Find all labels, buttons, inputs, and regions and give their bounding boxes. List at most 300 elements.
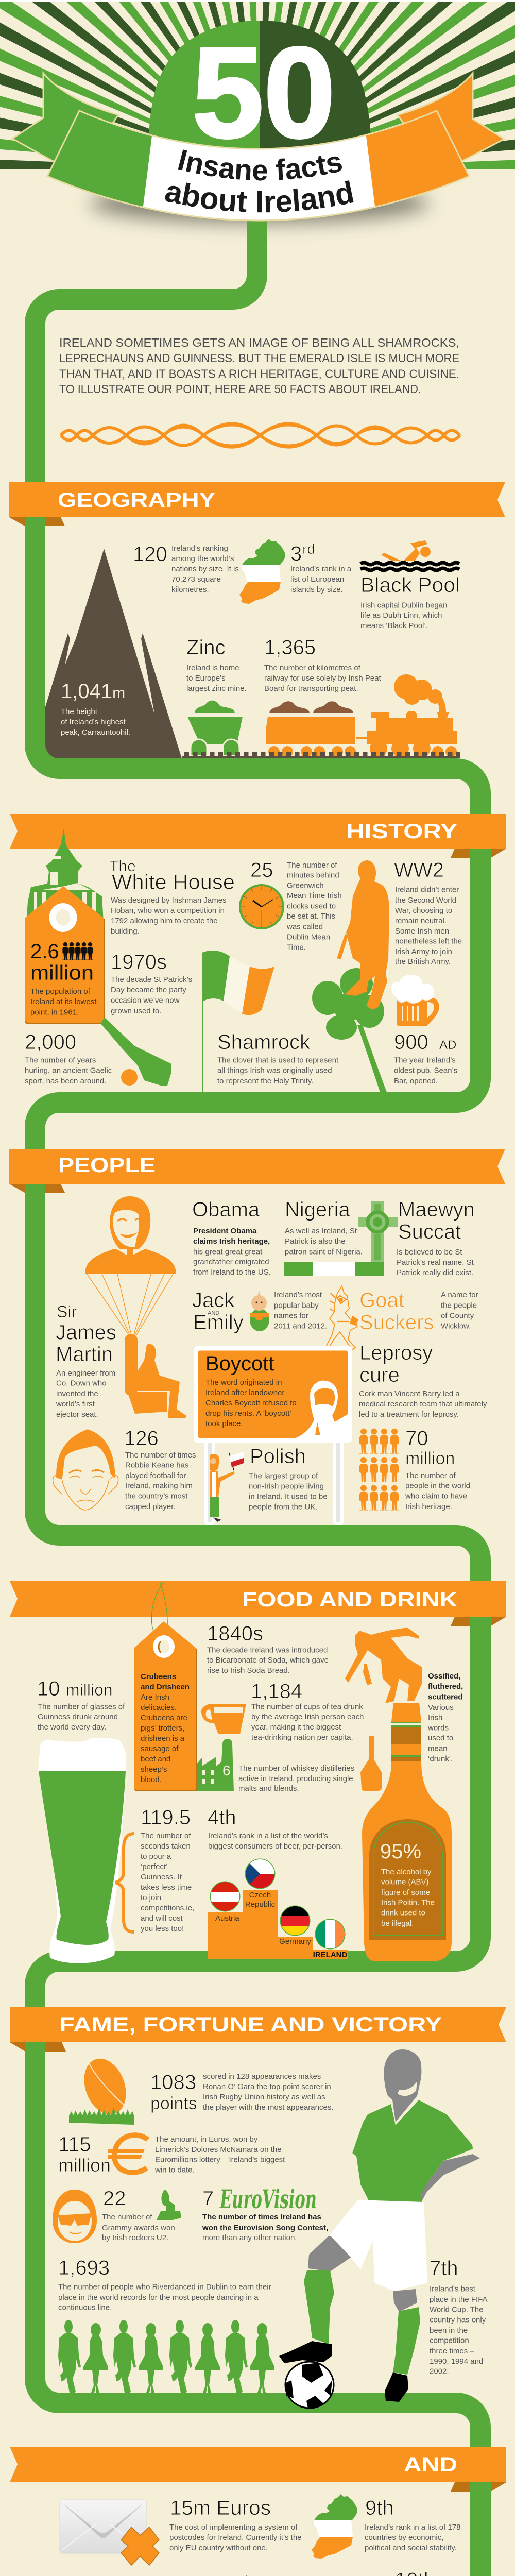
fact: 126: the country’s most (125, 1492, 188, 1501)
section: food and drink (37, 1582, 463, 1963)
fact: 1083 points with rugby ball (69, 2053, 333, 2125)
fact: 2,000 (25, 1031, 112, 1086)
fact: 7th world cup: World Cup. The (430, 2305, 483, 2314)
fact: 126: capped player. (125, 1502, 176, 1511)
icon: large poitin bottle: figure of some (381, 1888, 430, 1897)
fact: Ossified (427, 1672, 463, 1764)
fact: 25 minutes with clock: Mean Time Irish (287, 891, 342, 900)
fact: 25 minutes with clock (240, 859, 342, 952)
fact: Black Pool with swimmer (360, 540, 460, 630)
icon: Polish man with flag (210, 1452, 244, 1522)
icon: large poitin bottle: be illegal. (381, 1919, 414, 1928)
icon: large poitin bottle (362, 1703, 452, 1961)
intro text: THAN THAT, AND IT BOASTS A RICH HERITAGE, CULTURE AND CUISINE. (59, 367, 459, 380)
portrait: Bono (53, 2190, 97, 2243)
banner: PEOPLE: PEOPLE (58, 1154, 156, 1177)
icon: distillery factory (196, 1739, 234, 1791)
tag: 2.6 million population: 2.6 (30, 940, 59, 963)
fact: Goat Suckers: Wicklow. (441, 1322, 471, 1330)
fact: 70 million: people in the world (405, 1482, 470, 1490)
fact: 2,000: sport, has been around. (25, 1077, 106, 1086)
fact: Obama: claims Irish heritage, (193, 1237, 270, 1246)
fact: WW2: the British Army. (395, 957, 451, 966)
fact: Maewyn Succat: Is believed to be St (397, 1248, 462, 1257)
fact: Nigeria: Patrick is also the (285, 1237, 346, 1246)
fact: 1,041m mountain text: 1,041m (61, 680, 125, 703)
fact: 9th: 9th (365, 2497, 394, 2519)
title text: Insane facts about Ireland: Insane facts (178, 149, 342, 181)
fact: 70 million: 70 (405, 1427, 428, 1450)
fact: 126: The number of times (125, 1451, 196, 1460)
sign: Boycott: Boycott (205, 1352, 274, 1375)
fact: Maewyn Succat (397, 1198, 475, 1277)
fact: Black Pool with swimmer: means ‘Black Pool’. (360, 621, 428, 630)
fact: White House: building. (111, 927, 140, 936)
fact: 1,041m mountain text: The height (61, 707, 98, 716)
chart: beer consumption podium: Austria (215, 1914, 239, 1923)
flag: Germany (280, 1905, 310, 1936)
fact: Maewyn Succat: Maewyn (398, 1198, 475, 1221)
sign: Boycott: Charles Boycott refused to (205, 1399, 297, 1408)
fact: 119.5: competitions.ie, (141, 1904, 194, 1912)
flag: Ireland (314, 1919, 347, 1950)
icon: goat sucker creature (327, 1286, 358, 1350)
intro text: TO ILLUSTRATE OUR POINT, HERE ARE 50 FACTS ABOUT IRELAND. (59, 382, 421, 396)
section: fame, fortune and victory (53, 2049, 488, 2409)
icon: White House cupola (26, 828, 104, 922)
fact: 900 AD: oldest pub, Sean’s (394, 1066, 457, 1075)
fact: 119.5 (115, 1806, 194, 1933)
fact: Sir James Martin: ejector seat. (56, 1410, 98, 1419)
fact: 2,000: The number of years (25, 1056, 96, 1064)
fact: 119.5: and will cost (141, 1914, 183, 1923)
fact: 1,693 Riverdance: The number of people who Riverdanced in Dublin to earn their (58, 2283, 271, 2292)
fact: 119.5: to pour a (141, 1852, 171, 1861)
fact: 1,184: The number of cups of tea drunk (251, 1702, 363, 1711)
fact: 6 distilleries: malts and blends. (238, 1784, 299, 1793)
fact: WW2: remain neutral. (395, 917, 447, 925)
fact: 7th world cup: country has only (430, 2316, 486, 2325)
fact: 119.5: seconds taken (141, 1842, 191, 1851)
fact: Maewyn Succat: Patrick’s real name. St (397, 1258, 474, 1267)
fact: 1840s: to Bicarbonate of Soda, which gave (207, 1656, 329, 1665)
fact: 120: Ireland’s ranking (171, 544, 228, 553)
fact: 7th world cup: 2002. (430, 2367, 449, 2376)
flag: Czech Republic (245, 1859, 275, 1889)
fact: 10 million: 10 (37, 1677, 60, 1700)
fact: Sir James Martin: Co. Down who (56, 1379, 107, 1388)
fact: 25 minutes with clock: Greenwich (287, 882, 324, 890)
orange knot ornament (61, 423, 460, 447)
chart: beer consumption podium: Germany (279, 1937, 311, 1946)
banner: FOOD AND DRINK (10, 1581, 506, 1617)
fact: Polish: Polish (250, 1445, 306, 1468)
fact: Ossified: fluthered, (428, 1682, 463, 1691)
fact: 22 Grammys (102, 2188, 181, 2242)
fact: 7 Eurovision (202, 2184, 328, 2242)
fact: 115 million with euro sign (58, 2133, 285, 2176)
fact: WW2: Ireland didn’t enter (395, 885, 459, 894)
fact: 900 AD: The year Ireland’s (394, 1056, 456, 1064)
fact: 70 million: million (405, 1449, 455, 1468)
fact: Leprosy cure: Cork man Vincent Barry led a (359, 1389, 460, 1398)
fact: Goat Suckers: of County (441, 1312, 474, 1320)
fact: 1,365: The number of kilometres of (264, 664, 361, 672)
fact: 126: played football for (125, 1471, 186, 1480)
fact: 22 Grammys: by Irish rockers U2. (102, 2233, 168, 2242)
fact: Zinc (186, 636, 247, 693)
fact: 1970s: Day became the party (111, 986, 186, 994)
sign: Boycott: Ireland after landowner (205, 1388, 284, 1397)
fact: 15m Euros: postcodes for Ireland. Currently it’s the (169, 2533, 302, 2542)
fact: 70 million: The number of (405, 1471, 456, 1480)
tag: Crubeens and Drisheen: Crubeens (141, 1672, 176, 1681)
fact: 22 Grammys: 22 (103, 2188, 126, 2210)
fact: 1,693 Riverdance: continuous line. (58, 2303, 112, 2312)
fact: 70 million: Irish heritage. (405, 1502, 452, 1511)
fact: 3rd: 3 (290, 543, 302, 565)
fact: WW2: Irish Army to join (395, 947, 452, 956)
fact: 1,693 Riverdance (58, 2257, 271, 2312)
sign: Boycott (194, 1346, 352, 1443)
fact: WW2: Some Irish men (395, 927, 449, 936)
icon: large poitin bottle: drink used to (381, 1909, 425, 1918)
fact: 7th world cup: Ireland’s best (430, 2284, 476, 2294)
fact: 1,184: by the average Irish person each (251, 1713, 364, 1721)
fact: 1,041m mountain text: of Ireland’s highest (61, 718, 126, 726)
banner: GEOGRAPHY: GEOGRAPHY (58, 489, 215, 512)
fact: 7 Eurovision: The number of times Ireland has (202, 2213, 321, 2222)
fact: 1,041m mountain text: peak, Carrauntoohil. (61, 728, 130, 737)
fact: 1083 points with rugby ball: Irish Rugby Union history as well as (203, 2093, 325, 2102)
fact: 7th world cup: 7th (430, 2257, 458, 2280)
fact: 3rd: list of European (290, 575, 344, 584)
fact: 22 Grammys: The number of (102, 2213, 152, 2222)
fact: 7 Eurovision: 7 (202, 2188, 214, 2210)
fact: 119.5: The number of (141, 1832, 191, 1840)
intro text: LEPRECHAUNS AND GUINNESS. BUT THE EMERALD ISLE IS MUCH MORE (59, 351, 459, 365)
icon: Ireland map (239, 538, 287, 605)
fact: 15m Euros: 15m Euros (170, 2497, 271, 2519)
fact: 3rd: islands by size. (290, 585, 343, 594)
fact: 1083 points with rugby ball: Ronan O’ Gara the top point scorer in (203, 2082, 331, 2091)
fact: 7th world cup: competition (430, 2336, 469, 2345)
fact: 115 million with euro sign: 115 (58, 2133, 91, 2156)
tag: 2.6 million population: Ireland at its lowest (30, 997, 97, 1006)
fact: 9th: political and social stability. (365, 2544, 457, 2552)
icon: envelope with X (60, 2500, 159, 2565)
fact: 3rd: Ireland’s rank in a (290, 565, 352, 573)
fact: 1,365: railway for use solely by Irish Peat (264, 674, 382, 683)
fact: 119.5: takes less time (141, 1883, 192, 1892)
fact: 1970s: grown used to. (111, 1007, 161, 1015)
fact: 126: Ireland, making him (125, 1482, 193, 1490)
fact: 1083 points with rugby ball: the player with the most appearances. (203, 2103, 333, 2112)
fact: 7 Eurovision: more than any other nation. (202, 2233, 297, 2242)
fact: 1083 points with rugby ball: scored in 128 appearances makes (203, 2072, 321, 2081)
fact: Jack and Emily with baby: popular baby (274, 1301, 319, 1310)
fact: 15m Euros: only EU country without one. (169, 2544, 268, 2552)
fact: Goat Suckers: Goat (359, 1289, 404, 1312)
title badge: 50: 50 (192, 21, 335, 164)
fact: 115 million with euro sign: Limerick’s Dolores McNamara on the (155, 2145, 282, 2154)
fact: 25 minutes with clock: Dublin Mean (287, 933, 330, 942)
fact: 115 million with euro sign: The amount, in Euros, won by (155, 2135, 258, 2144)
fact: Obama: from Ireland to the US. (193, 1268, 271, 1277)
fact: WW2: War, choosing to (395, 906, 452, 915)
illustration: Obama parachute and ejector seat (85, 1196, 186, 1418)
fact: 1,184 (251, 1680, 364, 1742)
fact: Polish: non-Irish people living (249, 1482, 324, 1491)
fact: Sir James Martin: world’s first (56, 1400, 95, 1409)
tag: Crubeens and Drisheen: sheep’s (141, 1765, 167, 1774)
fact: 900 AD: AD (439, 1038, 456, 1052)
fact: Zinc: largest zinc mine. (186, 684, 247, 693)
fact: 126: 126 (124, 1427, 159, 1450)
fact: 115 million with euro sign: win to date. (154, 2166, 195, 2175)
icon: large poitin bottle: 95% (380, 1840, 421, 1863)
intro text (59, 336, 459, 396)
icon: soldier (337, 860, 389, 1009)
flag: Austria (210, 1882, 240, 1911)
tag: Crubeens and Drisheen (134, 1621, 197, 1791)
fact: Sir James Martin: Sir (57, 1302, 77, 1321)
fact: 10 million: Guinness drunk around (38, 1713, 118, 1721)
fact: Leprosy cure: Leprosy (359, 1342, 433, 1364)
fact: WW2: the Second World (395, 896, 456, 905)
fact: 70 million (405, 1427, 470, 1511)
fact: Ossified: mean (428, 1744, 448, 1753)
fact: 15m Euros (169, 2497, 302, 2552)
fact: 1,041m mountain text (61, 680, 130, 737)
tag: Crubeens and Drisheen: beef and (141, 1755, 170, 1764)
fact: White House (109, 858, 235, 936)
banner: FOOD AND DRINK: FOOD AND DRINK (242, 1588, 457, 1611)
section: history (25, 828, 462, 1092)
title text line 2: about Ireland (165, 180, 354, 212)
tag: Crubeens and Drisheen: blood. (141, 1775, 162, 1784)
fact: 1970s: occasion we’ve now (111, 996, 180, 1005)
section: people (53, 1196, 487, 1525)
fact: Jack and Emily with baby: 2011 and 2012. (274, 1322, 327, 1330)
icon: Ireland map (312, 2494, 359, 2561)
tag: Crubeens and Drisheen: delicacies. (141, 1703, 177, 1712)
section: geography (61, 538, 460, 758)
fact: 1083 points with rugby ball: 1083 (150, 2071, 196, 2094)
fact: 1,184: tea-drinking nation per capita. (251, 1733, 353, 1742)
fact: 900 AD: 900 (394, 1031, 428, 1054)
fact: Polish: people from the UK. (249, 1503, 317, 1512)
fact: 6 distilleries: active in Ireland, producing single (238, 1774, 353, 1783)
banner: HISTORY: HISTORY (346, 820, 457, 843)
fact: 2,000: 2,000 (25, 1031, 76, 1054)
fact: Jack and Emily with baby: AND (208, 1310, 219, 1316)
fact: Nigeria: patron saint of Nigeria. (285, 1248, 363, 1256)
fact: 1,184: 1,184 (251, 1680, 302, 1703)
fact: 6 distilleries: The number of whiskey distilleries (238, 1764, 354, 1773)
icon: tea cup (201, 1704, 246, 1734)
fact: 119.5: Guinness. It (141, 1873, 182, 1882)
fact: 119.5: you less too! (141, 1924, 184, 1933)
fact: Shamrock: all things Irish was originally used (217, 1066, 332, 1075)
icon: row of dancers (58, 2320, 274, 2393)
icon: train (266, 674, 457, 757)
fact: 126 (124, 1427, 196, 1511)
fact: Leprosy cure: cure (359, 1364, 400, 1386)
fact: Jack and Emily with baby: Emily (193, 1311, 244, 1334)
fact: Polish (249, 1445, 328, 1512)
fact: Goat Suckers: the people (441, 1301, 477, 1310)
fact: Ossified: used to (428, 1734, 453, 1742)
banner: FAME, FORTUNE AND VICTORY: FAME, FORTUNE AND VICTORY (59, 2013, 442, 2036)
icon: distillery factory: 6 (222, 1762, 231, 1778)
chart: beer consumption podium: Czech (249, 1891, 271, 1900)
fact: 120: kilometres. (171, 585, 209, 594)
icon: football (285, 2362, 334, 2409)
fact: 115 million with euro sign: million (58, 2155, 111, 2176)
icon: small whiskey bottle (360, 1736, 382, 1791)
fact: Jack and Emily with baby: Jack (192, 1289, 235, 1312)
fact: White House: The (109, 858, 136, 875)
icon: grid of people (359, 1429, 399, 1511)
icon: celtic cross (358, 1201, 398, 1262)
fact: 1,365 (264, 636, 382, 693)
fact: 119.5: ‘perfect’ (141, 1862, 168, 1871)
fact: White House: Was designed by Irishman James (111, 896, 227, 905)
banner: FAME, FORTUNE AND VICTORY (10, 2007, 506, 2042)
fact: 25 minutes with clock: be set at. This (287, 912, 335, 921)
icon: mine cart (187, 701, 243, 756)
sign posts (204, 1440, 344, 1525)
fact: Sir James Martin: An engineer from (56, 1369, 115, 1378)
banner: AND (10, 2447, 506, 2482)
railway track (182, 754, 460, 758)
fact: Nigeria: Nigeria (285, 1198, 350, 1221)
fact: Sir James Martin: James (56, 1321, 116, 1344)
sign: Boycott: The word originated in (205, 1378, 282, 1387)
fact: 1,693 Riverdance: place in the world records for the most people dancing in a (58, 2293, 259, 2302)
fact: 70 million: who claim to have (405, 1492, 467, 1501)
fact: 22 Grammys: Grammy awards won (102, 2224, 175, 2232)
fact: 1083 points with rugby ball: points (150, 2094, 197, 2113)
icon: drunk man (345, 1628, 422, 1703)
fact: 115 million with euro sign: Euromillions lottery – Ireland’s biggest (155, 2156, 285, 2164)
tag: 2.6 million population (25, 886, 105, 1024)
fact: Jack and Emily with baby (192, 1289, 327, 1334)
fact: 3rd (290, 541, 352, 594)
fact: Obama: Obama (192, 1198, 260, 1221)
icon: large poitin bottle: volume (ABV) (381, 1877, 429, 1887)
intro text: IRELAND SOMETIMES GETS AN IMAGE OF BEING ALL SHAMROCKS, (59, 336, 459, 349)
illustration: footballer (279, 2049, 480, 2402)
fact: 900 AD (394, 1031, 457, 1086)
fact: 126: Robbie Keane has (125, 1461, 188, 1469)
fact: 9th: Ireland’s rank in a list of 178 (365, 2523, 460, 2532)
fact: 119.5: 119.5 (141, 1806, 191, 1829)
portrait: Robbie Keane (53, 1430, 118, 1510)
icon: large poitin bottle: The alcohol by (381, 1868, 432, 1876)
icon: Irish flag with pole (202, 951, 274, 1092)
sign: Boycott: drop his rents. A ‘boycott’ (205, 1409, 291, 1418)
fact: Shamrock: to represent the Holy Trinity. (217, 1077, 313, 1086)
fact: 900 AD: Bar, opened. (394, 1077, 438, 1086)
tag: Crubeens and Drisheen: Crubeens are (141, 1714, 187, 1722)
fact: 120: among the world’s (171, 554, 234, 563)
fact: Shamrock (217, 1031, 339, 1086)
chart: beer consumption podium: Republic (245, 1900, 276, 1909)
fact: Obama: grandfather emigrated (193, 1258, 269, 1266)
fact: 25 minutes with clock: was called (286, 922, 323, 931)
tag: Crubeens and Drisheen: drisheen is a (141, 1734, 185, 1743)
fact: 3rd: rd (302, 541, 315, 557)
fact: Polish: in Ireland. It used to be (249, 1492, 328, 1501)
tag: Crubeens and Drisheen: Are Irish (141, 1693, 169, 1702)
fact: Sir James Martin: Martin (56, 1343, 113, 1366)
fact: Leprosy cure: led to a treatment for leprosy. (359, 1410, 459, 1419)
section: and (59, 2494, 462, 2576)
fact: 120: 120 (133, 543, 167, 566)
fact: Goat Suckers (359, 1289, 478, 1334)
banner: AND: AND (404, 2453, 457, 2476)
fact: Jack and Emily with baby: names for (274, 1312, 308, 1320)
icon: pint glass (38, 1738, 126, 1963)
icon: hurley and sliotar (100, 1018, 171, 1086)
icon: hanging string (151, 1582, 167, 1643)
fact: 7th world cup: been in the (430, 2326, 468, 2335)
fact: 1970s (111, 951, 192, 1015)
fact: 1,184: year, making it the biggest (251, 1723, 341, 1732)
fact: White House: Hoban, who won a competition in (111, 906, 225, 915)
fact: Zinc: Ireland is home (186, 664, 239, 672)
fact: Nigeria: As well as Ireland, St (285, 1227, 357, 1235)
fact: Black Pool with swimmer: life as Dubh Linn, which (360, 611, 442, 620)
banner: PEOPLE (9, 1149, 505, 1184)
fact: Obama: President Obama (193, 1227, 257, 1235)
fact: Ossified: Irish (428, 1714, 442, 1722)
fact: 7th world cup (430, 2257, 488, 2376)
fact: 1840s (207, 1622, 329, 1675)
fact: 1970s: The decade St Patrick’s (111, 975, 192, 984)
fact: WW2: nonetheless left the (395, 937, 462, 946)
fact: Polish: The largest group of (249, 1471, 318, 1481)
icon: shamrock (312, 968, 387, 1092)
fact: Ossified: Ossified, (428, 1672, 460, 1681)
fact: White House: White House (112, 871, 235, 894)
fact: WW2 (394, 859, 462, 966)
fact: 120 (133, 543, 239, 594)
chart: beer consumption podium (208, 1857, 348, 1959)
header sunburst (0, 2, 515, 169)
icon: beer mug (391, 975, 439, 1026)
fact: 1,365: 1,365 (264, 636, 316, 659)
fact: Obama: his great great great (193, 1248, 263, 1256)
fact: 1840s: The decade Ireland was introduced (207, 1646, 328, 1655)
fact: Ossified: words (427, 1724, 449, 1733)
fact: Shamrock: The clover that is used to represent (217, 1056, 339, 1064)
fact: WW2: WW2 (394, 859, 444, 882)
fact: 25 minutes with clock: The number of (287, 861, 337, 870)
fact: Zinc: to Europe’s (186, 674, 226, 683)
fact: 9th (365, 2497, 460, 2552)
fact: 120: 70,273 square (171, 575, 221, 584)
fact: Ossified: ‘drunk’. (428, 1755, 453, 1764)
banner: GEOGRAPHY (9, 482, 505, 517)
fact: 10 million: the world every day. (38, 1723, 106, 1732)
fact: Goat Suckers: A name for (441, 1291, 478, 1299)
tag: 2.6 million population: The population of (30, 987, 91, 996)
fact: Sir James Martin (56, 1302, 116, 1419)
fact: Sir James Martin: invented the (56, 1389, 98, 1398)
